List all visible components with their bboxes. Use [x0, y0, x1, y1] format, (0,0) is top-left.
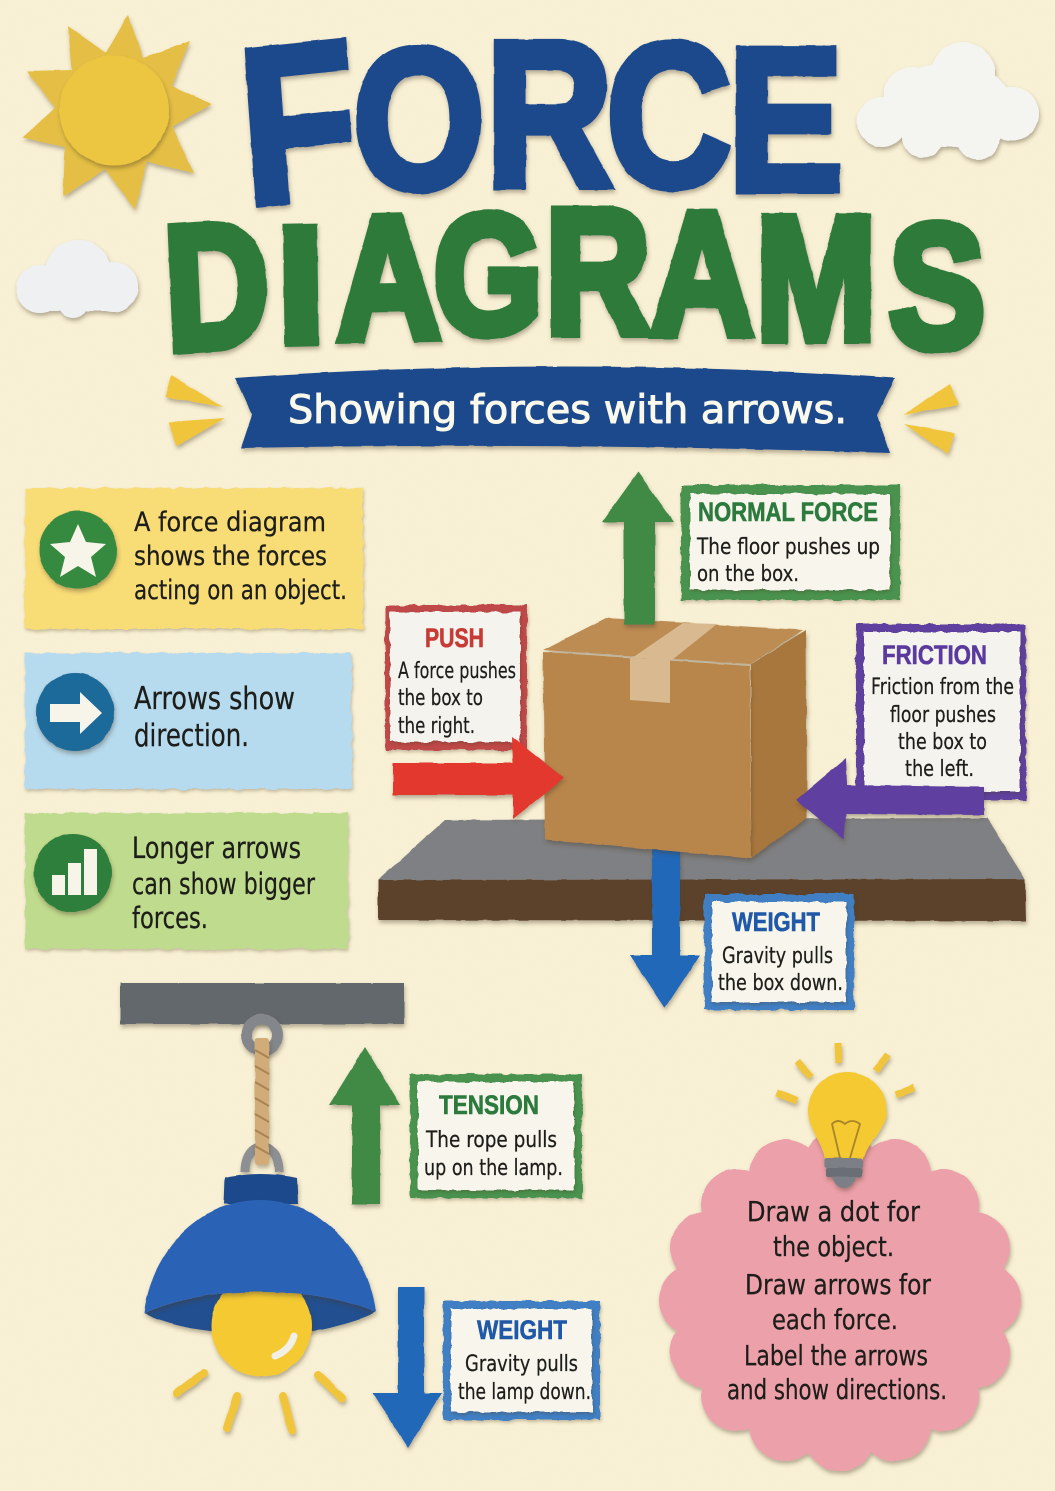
callout: tension: up on the lamp. — [424, 1156, 563, 1181]
arrow: push — [393, 737, 564, 819]
callout: weight of lamp: WEIGHT — [477, 1315, 567, 1345]
callout: normal force: on the box. — [697, 562, 799, 587]
title line: DIAGRAMS: S — [889, 188, 985, 385]
text: direction — [134, 681, 295, 754]
title line: DIAGRAMS — [160, 173, 985, 388]
callout: friction — [856, 624, 1026, 800]
title line: DIAGRAMS: I — [283, 202, 319, 370]
cardboard box — [543, 618, 807, 858]
icon: light bulb — [777, 1043, 914, 1188]
bulb highlight — [275, 1336, 294, 1356]
callout: push — [385, 605, 527, 750]
text: longer arrows — [132, 831, 315, 935]
light rays — [177, 1373, 342, 1430]
title line: DIAGRAMS: A — [650, 175, 754, 371]
icon: bars badge — [34, 834, 112, 912]
icon: sun — [22, 15, 212, 210]
panel: definition — [25, 488, 363, 629]
callout: weight of lamp: the lamp down. — [458, 1380, 591, 1405]
shade interior — [144, 1292, 376, 1331]
callout: push: PUSH — [425, 623, 484, 653]
title line: FORCE — [232, 0, 843, 252]
arrow: tension up — [329, 1047, 400, 1204]
subtitle banner: Showing forces with arrows. — [288, 388, 847, 433]
text: direction: Arrows show — [134, 681, 295, 717]
callout: friction: floor pushes — [890, 703, 996, 728]
ceiling bar — [120, 983, 404, 1024]
callout: normal force: NORMAL FORCE — [698, 497, 878, 527]
arrow: weight down on lamp — [373, 1287, 442, 1448]
title line: FORCE: R — [485, 0, 613, 230]
callout: normal force: The floor pushes up — [696, 535, 880, 560]
title line: FORCE: F — [232, 0, 365, 252]
bulb — [211, 1276, 312, 1376]
title line: FORCE: O — [353, 8, 485, 231]
text: tips — [727, 1195, 947, 1406]
title line: DIAGRAMS: R — [545, 173, 651, 371]
text: definition: A force diagram — [134, 507, 326, 538]
title line: FORCE: C — [606, 2, 732, 230]
packing tape — [630, 623, 717, 703]
ring hook — [246, 1020, 278, 1050]
text: longer arrows: forces. — [132, 901, 208, 935]
title line: DIAGRAMS: M — [756, 180, 876, 377]
callout: weight of box: Gravity pulls — [722, 944, 833, 969]
callout: weight of lamp: Gravity pulls — [465, 1352, 578, 1377]
lamp — [144, 1020, 376, 1430]
callout: friction: Friction from the — [871, 675, 1014, 700]
lamp shade — [144, 1200, 376, 1313]
arrow: normal force up — [602, 472, 674, 625]
floor platform — [378, 818, 1026, 921]
callout: friction: the box to — [898, 730, 987, 755]
icon: star badge — [39, 511, 117, 589]
text: tips: Draw arrows for — [745, 1268, 931, 1301]
icon: large cloud — [857, 42, 1039, 160]
text: definition: acting on an object. — [134, 575, 347, 606]
panel: longer arrows — [25, 813, 348, 949]
lamp cap — [224, 1174, 298, 1204]
callout: friction: the left. — [905, 757, 974, 782]
callout: weight of box — [704, 894, 854, 1010]
callout: weight of lamp — [443, 1301, 600, 1420]
callout: friction: FRICTION — [882, 640, 987, 670]
title — [160, 0, 985, 388]
text: tips: each force. — [772, 1303, 898, 1336]
title line: DIAGRAMS: D — [160, 185, 273, 388]
arrow: friction — [796, 758, 984, 839]
callout: push: A force pushes — [398, 659, 516, 684]
text: longer arrows: can show bigger — [132, 867, 315, 901]
text: definition: shows the forces — [134, 541, 327, 572]
callout: tension: TENSION — [439, 1090, 539, 1120]
subtitle banner — [235, 366, 895, 453]
text: tips: Label the arrows — [744, 1339, 928, 1372]
rope — [255, 1038, 269, 1165]
lower ring — [245, 1146, 279, 1172]
text: tips: Draw a dot for — [747, 1195, 920, 1228]
text: definition — [134, 507, 347, 606]
callout: tension: The rope pulls — [425, 1128, 557, 1153]
decorative yellow dashes left — [165, 375, 225, 446]
decorative yellow dashes right — [903, 384, 959, 454]
callout: tension — [410, 1074, 582, 1198]
callout: normal force — [681, 485, 900, 600]
panel: direction — [25, 653, 352, 789]
icon: small cloud — [16, 240, 138, 318]
callout: push: the right. — [398, 714, 475, 739]
title line: DIAGRAMS: G — [434, 179, 542, 369]
callout: weight of box: WEIGHT — [732, 907, 820, 937]
title line: DIAGRAMS: A — [335, 178, 441, 376]
callout: weight of box: the box down. — [718, 971, 843, 996]
text: tips: and show directions. — [727, 1373, 947, 1406]
text: direction: direction. — [134, 718, 249, 754]
text: tips: the object. — [773, 1230, 894, 1263]
title line: FORCE: E — [728, 7, 843, 234]
text: longer arrows: Longer arrows — [132, 831, 301, 865]
arrow: weight down on box — [630, 850, 700, 1008]
callout: push: the box to — [398, 686, 483, 711]
icon: arrow badge — [36, 673, 114, 751]
panel: tips cloud — [659, 1043, 1021, 1471]
